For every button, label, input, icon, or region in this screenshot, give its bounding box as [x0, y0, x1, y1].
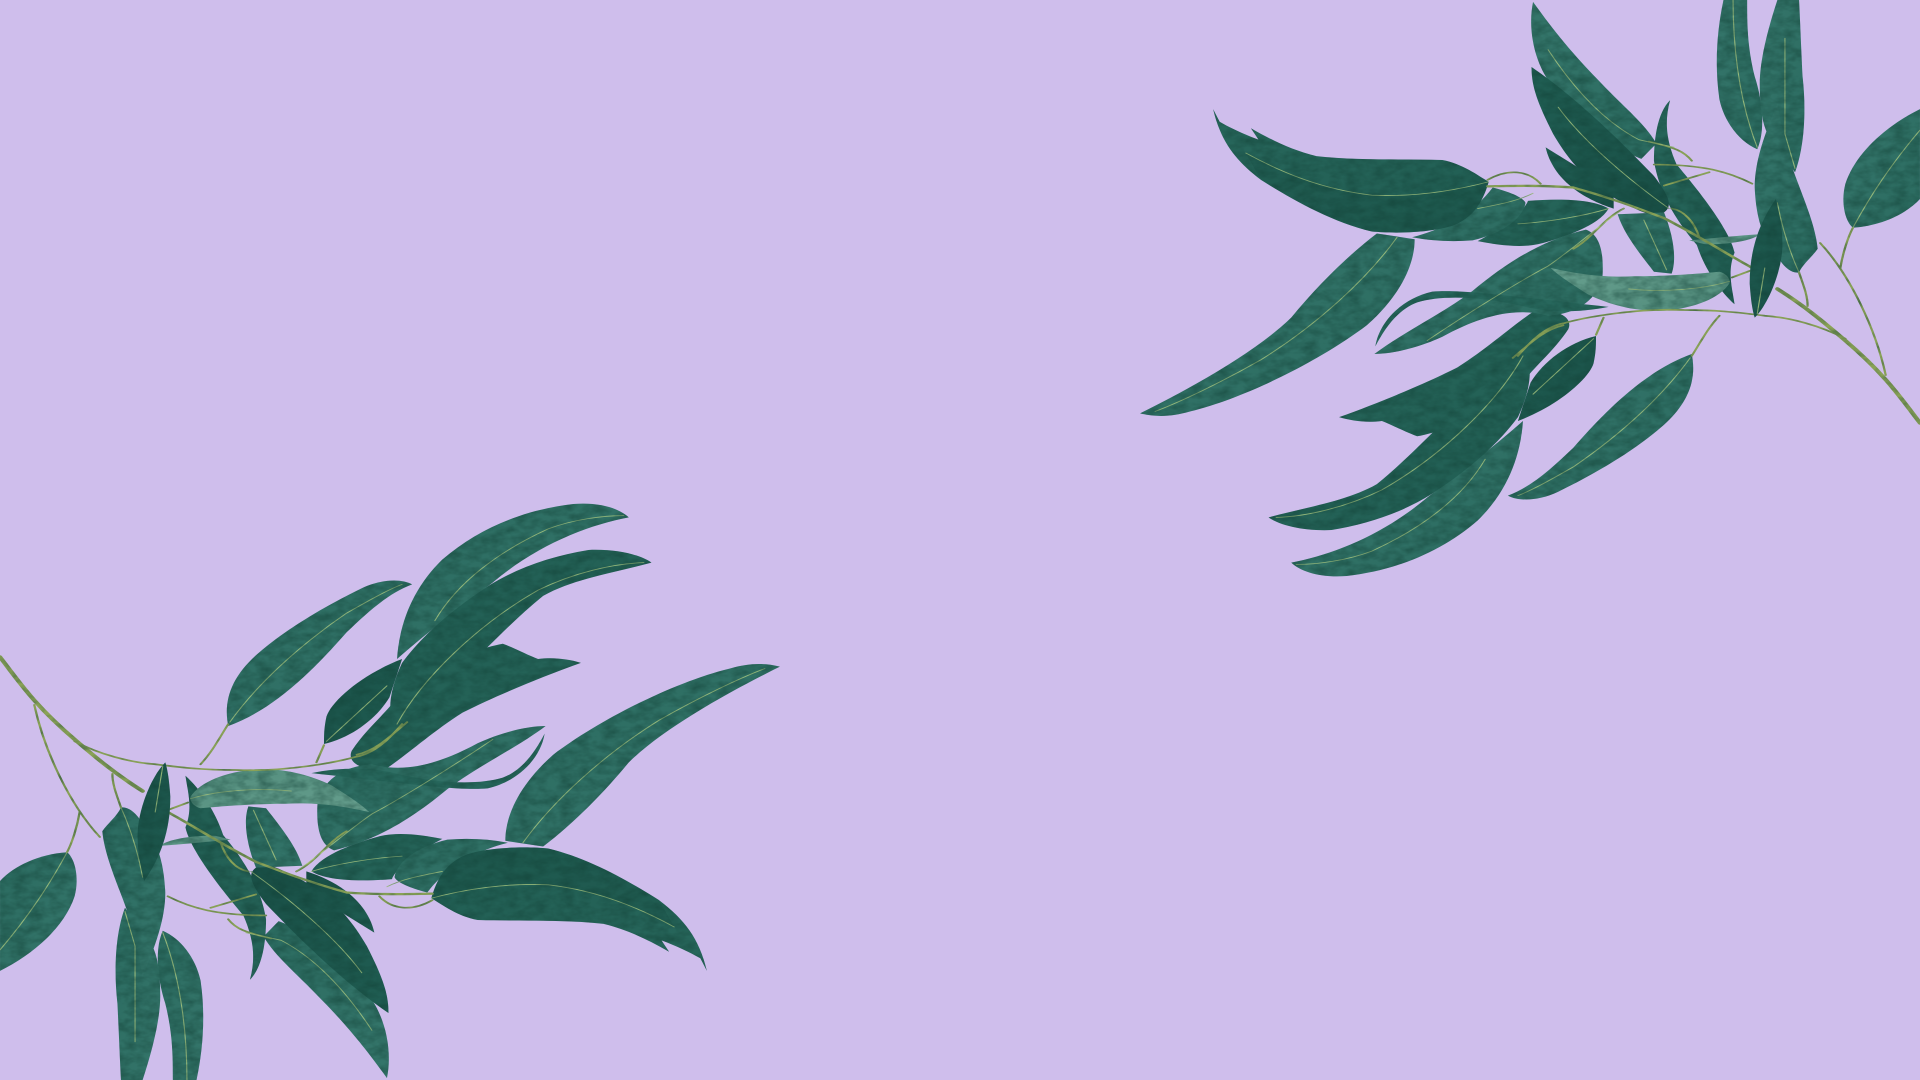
leaf: vertical left: [1717, 0, 1762, 149]
leaf: large top-left: [1213, 109, 1489, 233]
leaf: long left: [1140, 233, 1415, 416]
midribs: [1155, 0, 1920, 564]
leaf: narrow curved: [1375, 291, 1609, 346]
leaf: lowest: [1291, 421, 1523, 576]
leaf: behind large leaf dark: [1478, 200, 1609, 246]
back leaf: top pale: [1531, 2, 1656, 159]
leaf: upper dark: [1532, 67, 1669, 214]
back leaf: small dark: [1546, 147, 1614, 209]
leaf: far right: [1843, 109, 1920, 228]
leaf: stem side: [1618, 212, 1674, 274]
leaf: large vertical: [1755, 103, 1818, 273]
leaf: lower right: [1508, 354, 1693, 500]
shade: large leaf lower half: [1246, 153, 1489, 233]
leaf: lower middle back: [1339, 311, 1569, 436]
leaf: small pale: [1689, 234, 1760, 244]
leaf: pale centre: [1551, 268, 1730, 311]
branch: bottom left: [0, 504, 780, 1080]
back leaf: right narrow: [1654, 100, 1735, 304]
leaf: vertical right: [1760, 0, 1804, 172]
leaf: lower long: [1269, 354, 1530, 530]
leaf: small dark front: [1750, 199, 1782, 318]
leaf: lower dark back: [1518, 336, 1596, 421]
leaf: behind large leaf: [1412, 188, 1525, 241]
leaf: centre: [1374, 230, 1603, 354]
branch: top right: [1140, 0, 1920, 576]
stems: [1488, 142, 1920, 423]
